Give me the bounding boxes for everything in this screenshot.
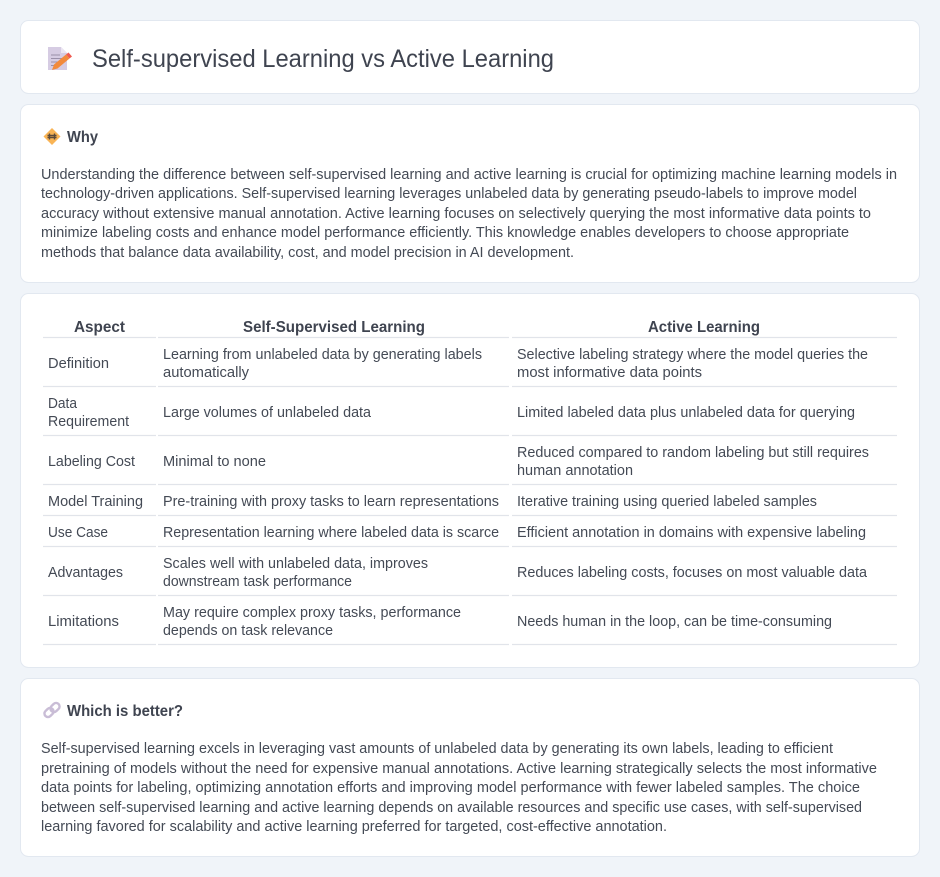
row: limitations: depends on task relevance	[163, 623, 333, 639]
row: definition: Selective labeling strategy where the model queries the	[517, 347, 868, 363]
row: model training	[48, 494, 817, 510]
row: limitations	[48, 605, 832, 639]
text block: why: minimize labeling costs and enhance model performance efficiently. This knowledge enables developers to choose appropriate	[41, 225, 849, 241]
text block: why: methods that balance data availability, cost, and model precision in AI development.	[41, 245, 574, 261]
title: Self-supervised Learning vs Active Learning	[92, 45, 554, 73]
panel: header	[20, 20, 920, 94]
row: model training: Model Training	[48, 494, 143, 510]
row: definition: most informative data points	[517, 365, 702, 381]
text block: which is better: data points for labeling, optimizing annotation efforts and improving model performance with fewer labeled samples. The choice	[41, 780, 860, 796]
row: use case: Representation learning where labeled data is scarce	[163, 525, 499, 541]
row: limitations: Limitations	[48, 614, 119, 630]
row: definition: automatically	[163, 365, 250, 381]
text block: why: technology-driven applications. Self-supervised learning leverages unlabeled data by generating pseudo-labels to improve model	[41, 186, 857, 202]
table header: Aspect	[74, 319, 126, 336]
row: advantages: Reduces labeling costs, focuses on most valuable data	[517, 565, 867, 581]
row: limitations: May require complex proxy tasks, performance	[163, 605, 461, 621]
table header	[74, 319, 760, 336]
row: labeling cost: human annotation	[517, 463, 633, 479]
row: labeling cost	[48, 445, 869, 479]
row: use case: Efficient annotation in domains with expensive labeling	[517, 525, 866, 541]
row: advantages	[48, 556, 867, 590]
row: model training: Iterative training using queried labeled samples	[517, 494, 817, 510]
table header: Active Learning	[648, 319, 760, 336]
row: definition	[48, 347, 868, 381]
row: data requirement: Limited labeled data plus unlabeled data for querying	[517, 405, 855, 421]
icon: document with pencil	[48, 47, 72, 70]
panel: why	[20, 104, 920, 282]
row: labeling cost: Reduced compared to random labeling but still requires	[517, 445, 869, 461]
row: data requirement	[48, 396, 855, 430]
text block: which is better: pretraining of models without the need for expensive manual annotations. Active learning strategically selects the most informative	[41, 761, 877, 777]
text block: which is better	[41, 741, 877, 835]
icon: warning diamond	[44, 128, 60, 145]
text block: which is better: learning favored for scalability and active learning preferred for targeted, cost-effective annotation.	[41, 819, 667, 835]
text block: why: accuracy without extensive manual annotation. Active learning focuses on selectively querying the most informative data points to	[41, 206, 871, 222]
table header: Self-Supervised Learning	[243, 319, 425, 336]
row: advantages: Advantages	[48, 565, 123, 581]
panel: comparison table	[20, 294, 920, 668]
text block: which is better: Self-supervised learning excels in leveraging vast amounts of unlabeled data by generating its own labels, leading to efficient	[41, 741, 833, 757]
row: data requirement: Data	[48, 396, 77, 412]
panel: which is better	[20, 678, 920, 856]
icon: link	[43, 701, 61, 719]
row: definition: Learning from unlabeled data by generating labels	[163, 347, 482, 363]
text block: which is better: between self-supervised learning and active learning depends on available resources and specific use cases, with self-supervised	[41, 800, 862, 816]
row: model training: Pre-training with proxy tasks to learn representations	[163, 494, 499, 510]
text block: why	[41, 167, 897, 261]
heading: why: Why	[67, 129, 98, 146]
row: advantages: downstream task performance	[163, 574, 352, 590]
text block: why: Understanding the difference between self-supervised learning and active learning is crucial for optimizing machine learning models in	[41, 167, 897, 183]
row: data requirement: Requirement	[48, 414, 129, 430]
row: limitations: Needs human in the loop, can be time-consuming	[517, 614, 832, 630]
row: advantages: Scales well with unlabeled data, improves	[163, 556, 428, 572]
row: labeling cost: Labeling Cost	[48, 454, 135, 470]
row: use case	[48, 525, 866, 541]
heading: which is better: Which is better?	[67, 703, 183, 720]
row: use case: Use Case	[48, 525, 108, 541]
row: definition: Definition	[48, 356, 109, 372]
row: data requirement: Large volumes of unlabeled data	[163, 405, 371, 421]
row: labeling cost: Minimal to none	[163, 454, 266, 470]
